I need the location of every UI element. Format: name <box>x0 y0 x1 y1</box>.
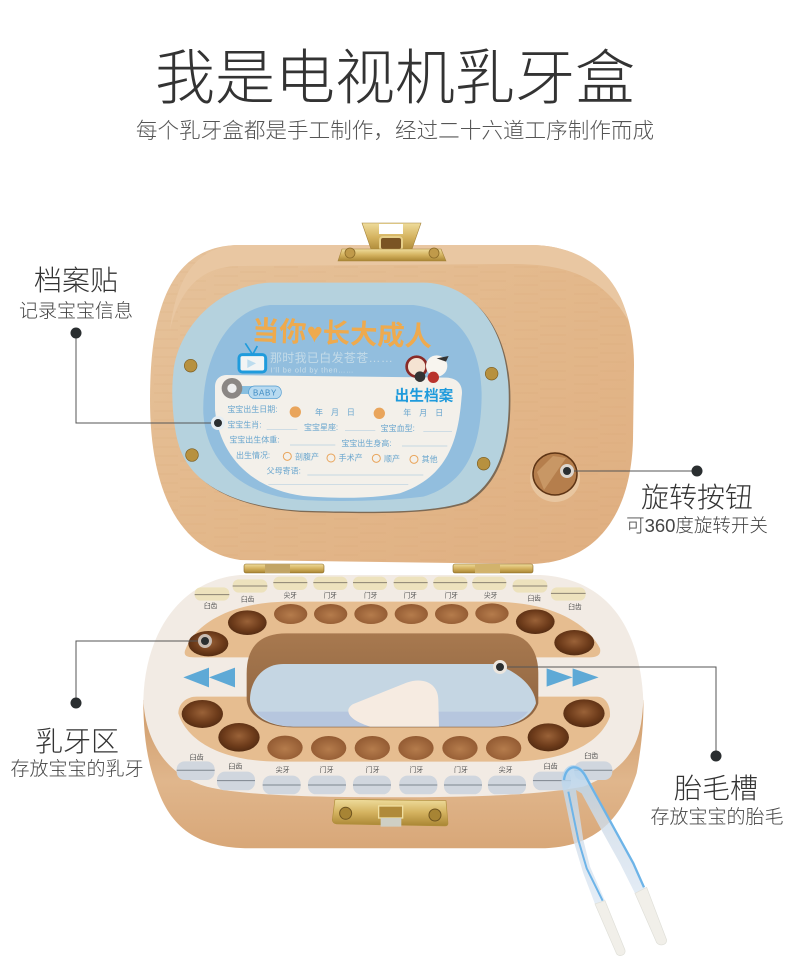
lower tooth slots <box>177 761 612 794</box>
text: BABY <box>249 386 281 399</box>
panel: blue tv screen frame <box>172 283 510 513</box>
text: card english: I'll be old by then…… <box>271 366 354 375</box>
upper tooth labels: 臼齿 <box>241 594 255 603</box>
form fields: 年 月 日 <box>315 407 355 417</box>
lower tooth labels: 臼齿 <box>228 762 242 771</box>
lower tooth holes <box>182 699 605 760</box>
icon: left arrows <box>183 668 235 687</box>
upper tooth holes <box>188 603 594 656</box>
upper tooth labels: 臼齿 <box>204 601 218 610</box>
lower tooth band <box>178 697 610 762</box>
heading: 乳牙区 <box>35 726 119 757</box>
form fields: 其他 <box>422 454 438 464</box>
form fields: 宝宝星座: <box>304 422 338 432</box>
title: 我是电视机乳牙盒 <box>155 45 635 112</box>
upper tooth labels <box>204 591 582 611</box>
leader line <box>76 333 217 423</box>
icon: front clasp <box>332 799 448 827</box>
form fields: 宝宝血型: <box>381 423 415 433</box>
icon: tweezers <box>562 765 667 956</box>
lower tooth labels: 门牙 <box>454 765 468 774</box>
heading: 旋转按钮 <box>641 482 753 513</box>
form fields: 宝宝出生身高: <box>341 438 391 448</box>
lower tooth labels: 臼齿 <box>544 762 558 771</box>
leader line <box>76 641 205 703</box>
panel: wooden lid <box>150 245 634 564</box>
card: birth record <box>215 315 462 498</box>
center tray <box>247 633 538 727</box>
start dot <box>70 698 82 708</box>
icon: rotary knob <box>530 453 580 502</box>
text: card subtitle: 那时我已白发苍苍…… <box>270 350 393 365</box>
text: BABY: BABY <box>253 388 277 397</box>
end dot <box>200 636 210 646</box>
form fields <box>227 404 452 485</box>
lower tooth labels: 臼齿 <box>190 753 204 762</box>
end dot <box>692 466 702 476</box>
lower tooth labels: 臼齿 <box>584 751 598 760</box>
leader line <box>567 470 697 472</box>
callout: baby tooth zone <box>10 636 210 780</box>
paper top <box>143 575 643 797</box>
callout: hair slot <box>494 662 784 828</box>
heading: 档案贴 <box>34 265 118 296</box>
description: 可360度旋转开关 <box>626 515 768 536</box>
icon: family cartoon <box>407 355 449 383</box>
upper tooth labels: 门牙 <box>445 591 458 600</box>
icon: right arrows <box>547 668 599 687</box>
icon: right hinge <box>453 564 533 573</box>
upper tooth labels: 门牙 <box>324 591 337 600</box>
description: 存放宝宝的乳牙 <box>10 758 144 780</box>
form fields: 宝宝出生日期: <box>227 404 277 414</box>
upper tooth labels: 门牙 <box>404 591 417 600</box>
description: 存放宝宝的胎毛 <box>650 806 784 828</box>
icon: tv <box>239 343 266 372</box>
form fields: 剖腹产 <box>295 451 319 461</box>
panel: box base <box>143 575 643 848</box>
callout: rotary button <box>562 466 768 536</box>
upper tooth labels: 尖牙 <box>484 591 498 600</box>
start dot <box>70 328 82 338</box>
form fields: 父母寄语: <box>267 465 301 475</box>
upper tooth slots <box>195 577 586 601</box>
text: card label: 出生档案 <box>395 387 454 405</box>
end dot <box>494 662 506 672</box>
upper tooth labels: 门牙 <box>364 591 378 600</box>
upper tooth labels: 臼齿 <box>528 593 541 602</box>
text: card headline: 当你♥长大成人 <box>251 315 433 352</box>
lower tooth labels: 尖牙 <box>499 765 513 774</box>
lower tooth labels: 尖牙 <box>276 765 290 774</box>
form fields: 出生情况: <box>236 450 270 460</box>
form fields: 手术产 <box>339 453 363 463</box>
icon: frame screws <box>184 359 498 470</box>
icon: left hinge <box>244 564 324 573</box>
form fields: 宝宝出生体重: <box>229 435 279 445</box>
description: 记录宝宝信息 <box>19 300 133 322</box>
upper tooth labels: 尖牙 <box>284 591 297 600</box>
leader line <box>500 667 716 756</box>
lower tooth labels: 门牙 <box>366 765 380 774</box>
upper tooth band <box>185 602 600 657</box>
wood body <box>143 700 643 848</box>
subtitle: 每个乳牙盒都是手工制作，经过二十六道工序制作而成 <box>136 118 654 143</box>
end dot <box>212 418 224 428</box>
icon: top clasp <box>338 223 446 261</box>
lower tooth labels <box>190 751 598 774</box>
callout: file sticker <box>19 265 224 428</box>
icon: film reel <box>222 378 258 399</box>
form fields: 顺产 <box>384 453 400 463</box>
form fields: 年 月 日 <box>403 408 443 418</box>
start dot <box>562 466 572 476</box>
upper tooth labels: 臼齿 <box>568 602 582 611</box>
lower tooth labels: 门牙 <box>320 765 334 774</box>
lower tooth labels: 门牙 <box>409 765 423 774</box>
form fields: 宝宝生肖: <box>227 419 261 429</box>
start dot <box>710 750 722 762</box>
heading: 胎毛槽 <box>674 773 758 804</box>
